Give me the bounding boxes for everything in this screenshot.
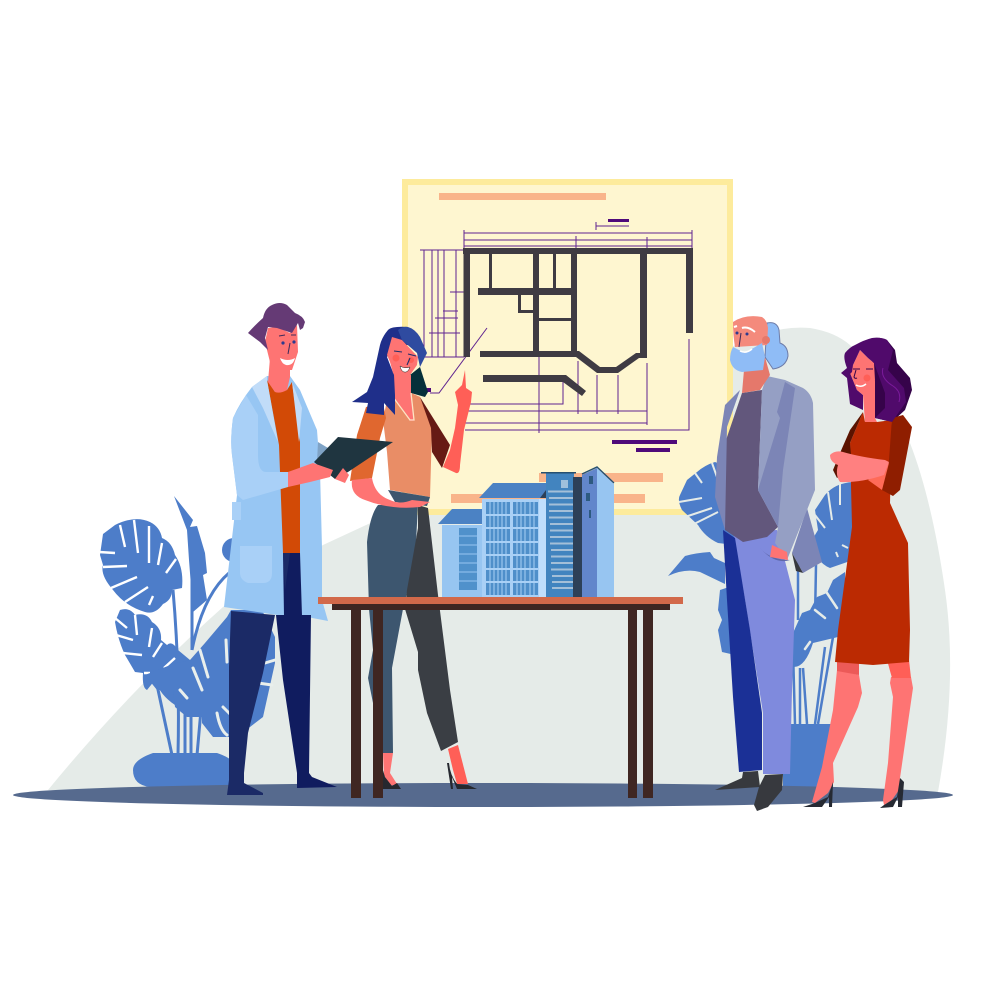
hair curl xyxy=(882,368,900,402)
building model xyxy=(438,467,614,597)
right sleeve xyxy=(882,415,912,496)
coat sleeve xyxy=(231,395,288,500)
shoes xyxy=(803,782,833,807)
jacket lapel xyxy=(758,382,795,527)
face details xyxy=(736,332,738,334)
collars xyxy=(252,376,278,442)
right sleeve xyxy=(420,397,450,468)
tower slats xyxy=(548,492,577,588)
table rail xyxy=(332,604,670,610)
leaf upper left xyxy=(679,462,735,545)
person: doctor with clipboard xyxy=(224,303,393,795)
table legs xyxy=(351,610,653,798)
right pot xyxy=(783,724,833,788)
leaf between people xyxy=(812,482,853,568)
necklace xyxy=(393,393,414,420)
shirt xyxy=(267,380,300,553)
left block xyxy=(442,525,482,597)
big monstera leaf xyxy=(99,519,182,613)
stems xyxy=(157,530,229,755)
left leg xyxy=(227,611,275,795)
dark trouser leg xyxy=(723,530,762,772)
tall leaf xyxy=(174,496,207,612)
coat xyxy=(224,376,328,621)
middle block xyxy=(482,499,546,597)
right leg xyxy=(883,677,913,805)
lower leaf behind man xyxy=(718,585,735,655)
table top xyxy=(318,597,683,604)
middle windows xyxy=(486,502,538,595)
shoes xyxy=(715,771,760,790)
chest shadow xyxy=(868,463,889,490)
hair back xyxy=(872,338,912,422)
upper trousers xyxy=(283,553,302,616)
forearm xyxy=(352,478,430,508)
hair xyxy=(248,303,305,350)
poster bars xyxy=(439,193,663,503)
ankles xyxy=(383,753,397,786)
pocket shadow and hand xyxy=(760,548,790,561)
hair xyxy=(352,327,410,415)
person: woman in red dress xyxy=(803,338,913,808)
arching leaf xyxy=(668,552,725,584)
left plant xyxy=(99,496,275,787)
dimension lines xyxy=(420,222,692,433)
face xyxy=(850,350,875,395)
background blob xyxy=(48,328,950,792)
poster frame xyxy=(402,179,733,515)
large monstera leaf xyxy=(145,610,275,737)
shoes xyxy=(382,767,401,789)
shirt xyxy=(725,390,778,542)
face details xyxy=(864,374,870,382)
dark notes xyxy=(420,219,677,452)
person: woman with pointer xyxy=(350,327,477,789)
neck xyxy=(268,358,290,393)
right plant xyxy=(668,462,853,788)
trousers front leg xyxy=(405,505,458,751)
right leg xyxy=(276,615,337,788)
beard xyxy=(730,343,765,372)
stems xyxy=(793,560,833,724)
floor shadow xyxy=(13,783,953,807)
hair xyxy=(844,338,906,422)
clipboard xyxy=(314,437,393,479)
left pot xyxy=(133,753,235,787)
left hair lobe xyxy=(841,368,863,410)
face details xyxy=(281,341,285,345)
hair back xyxy=(410,367,428,397)
face details xyxy=(392,354,400,362)
left leg xyxy=(812,670,862,803)
face xyxy=(265,325,298,370)
person: older man xyxy=(715,316,822,811)
left sleeve xyxy=(833,412,863,478)
right block xyxy=(582,468,597,597)
tower xyxy=(546,473,574,597)
light trouser leg xyxy=(733,530,795,774)
pocket xyxy=(240,546,272,583)
neck and chest xyxy=(385,373,420,421)
belt xyxy=(388,490,430,506)
small leaf behind coat xyxy=(222,538,246,562)
top xyxy=(383,393,432,497)
pointing arm xyxy=(443,370,472,473)
lower right leaf xyxy=(793,572,845,667)
middle monstera leaf xyxy=(115,609,200,705)
jacket left xyxy=(715,390,740,530)
jacket main xyxy=(758,376,815,560)
face xyxy=(387,337,418,380)
poster: floor plan xyxy=(402,179,733,515)
jacket tail xyxy=(792,508,822,573)
neck xyxy=(863,380,877,422)
back sleeve xyxy=(317,442,328,462)
dress xyxy=(835,412,910,665)
crossed arm xyxy=(830,451,889,482)
hair xyxy=(765,323,788,369)
neck xyxy=(742,357,770,393)
walls xyxy=(463,248,693,396)
bangs xyxy=(398,327,427,367)
hands xyxy=(288,463,333,487)
table xyxy=(318,597,683,798)
dark core xyxy=(573,477,582,597)
left sleeve xyxy=(350,403,386,481)
trousers back leg xyxy=(367,505,418,753)
head xyxy=(733,316,768,347)
